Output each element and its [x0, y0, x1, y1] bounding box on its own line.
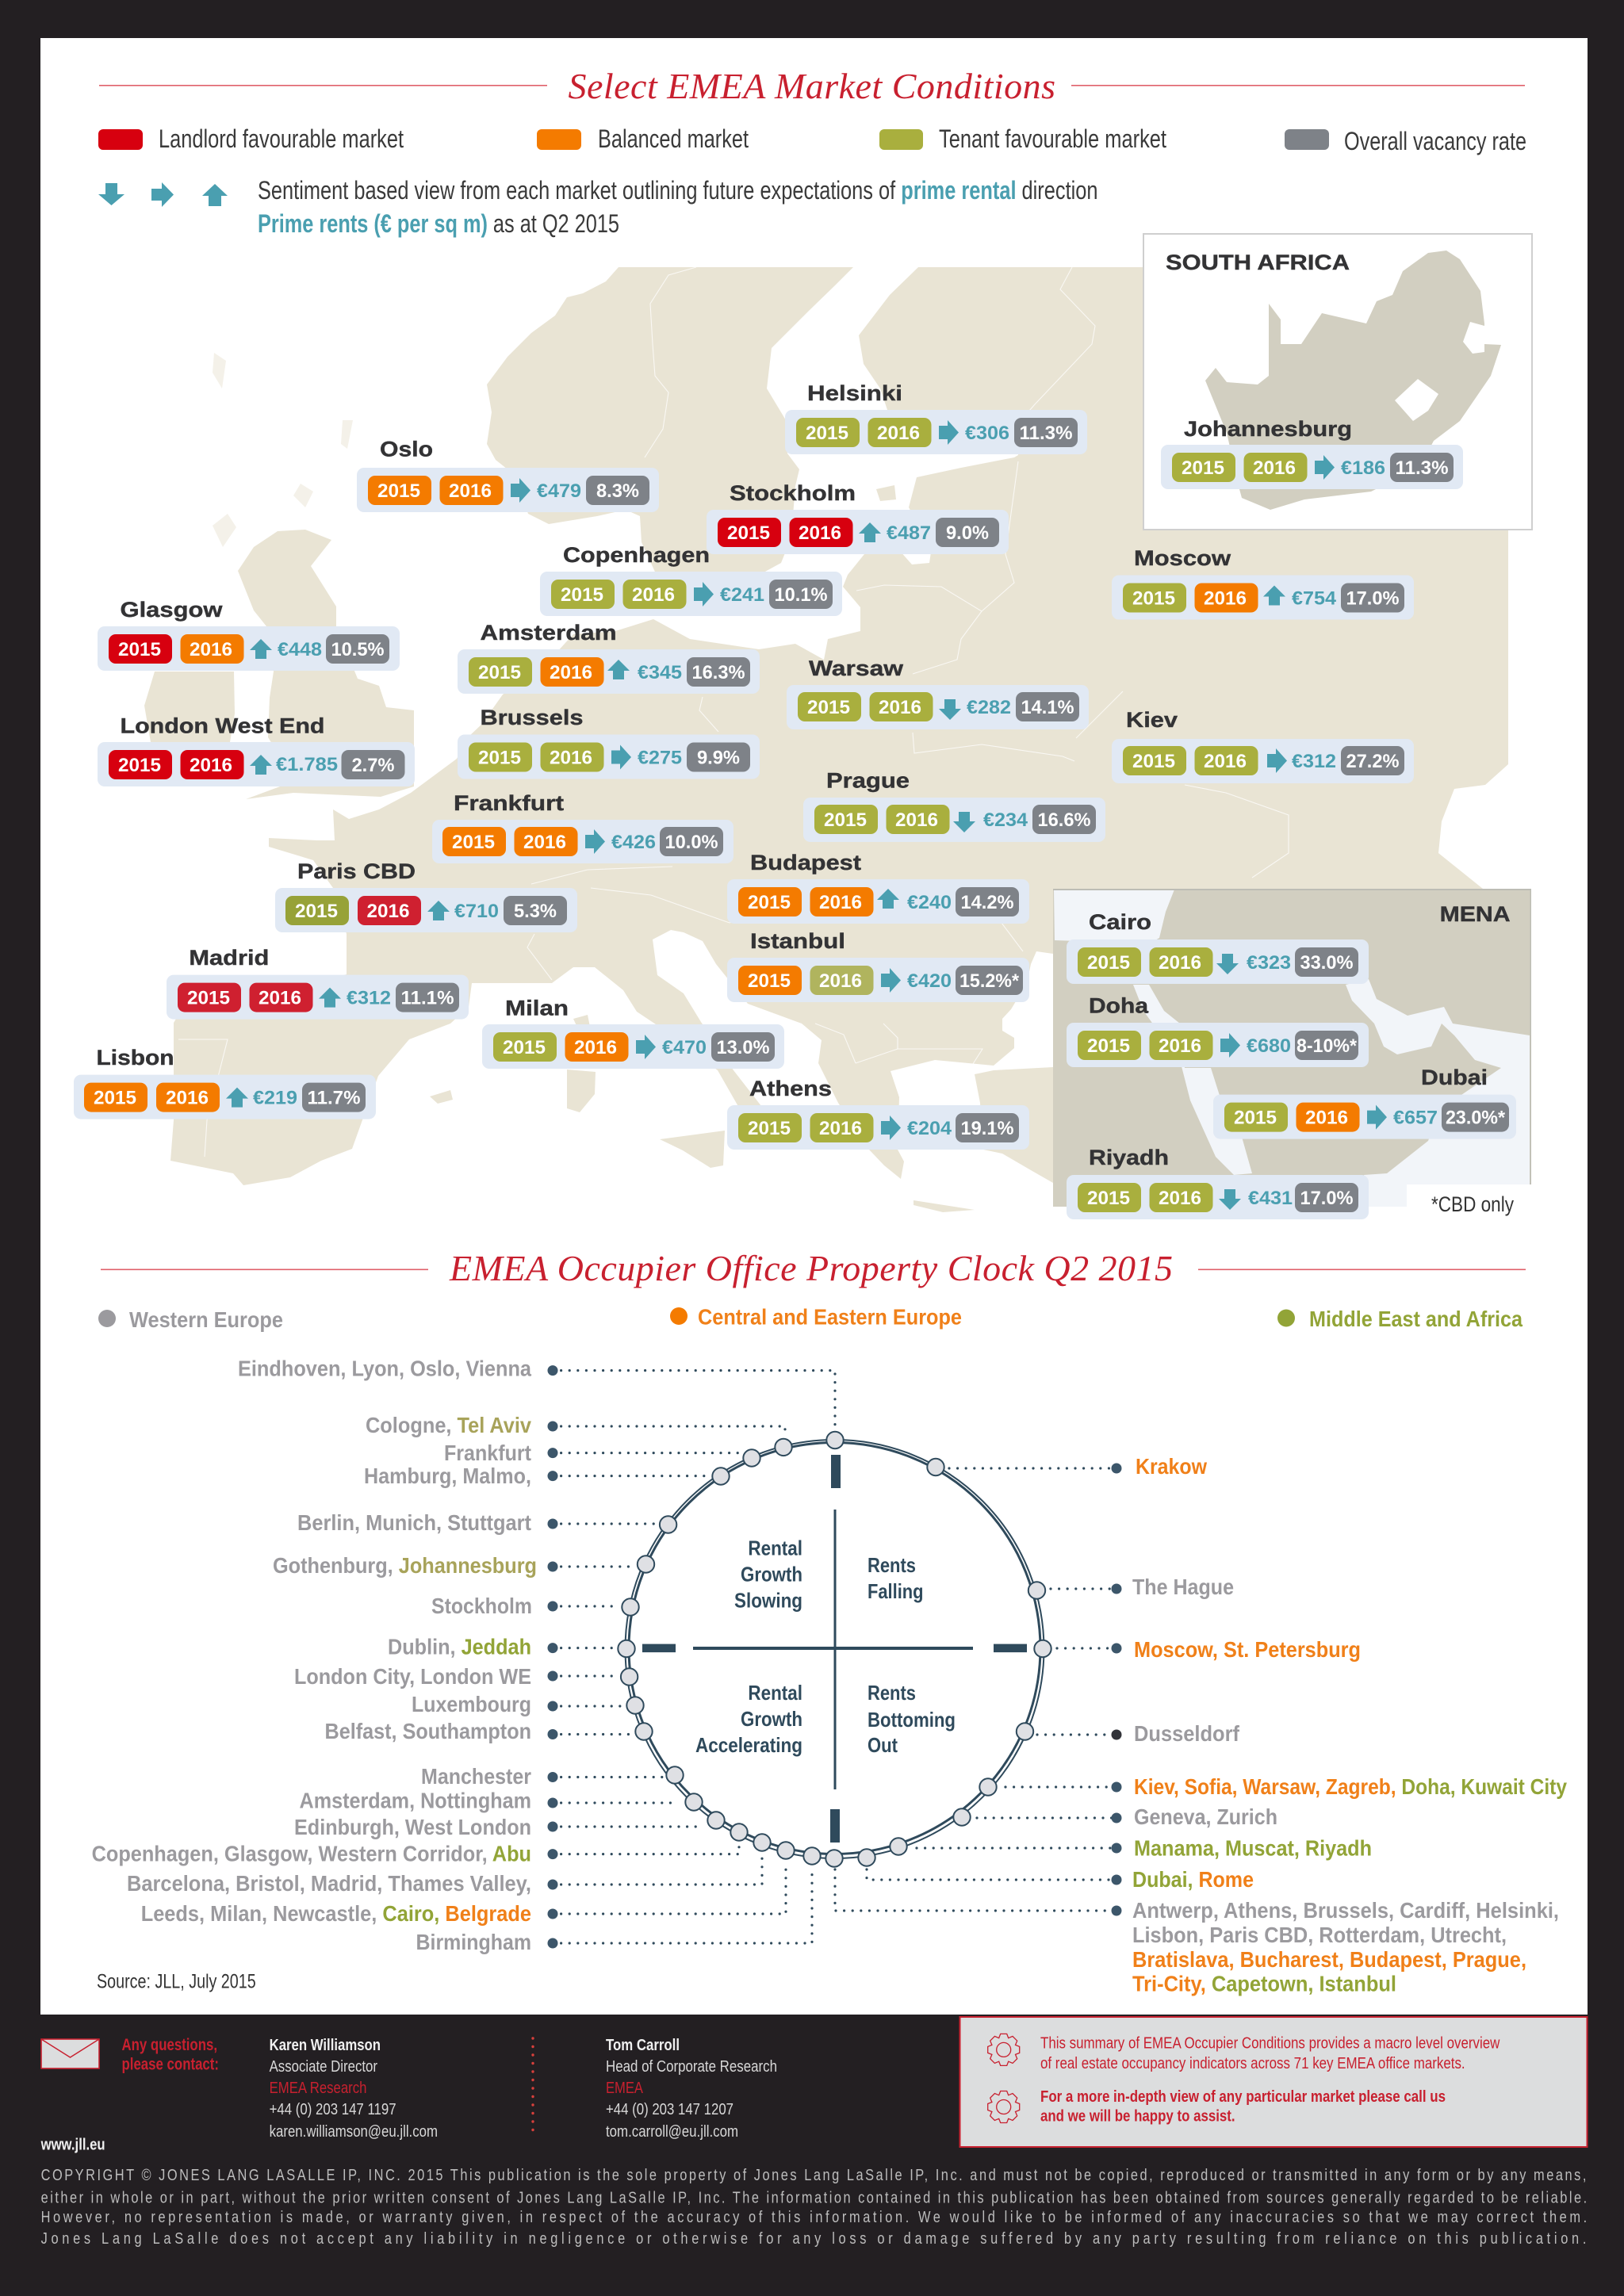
market: Amsterdam: 2016	[550, 662, 592, 683]
contact: Tom Carroll: tom.carroll@eu.jll.com	[606, 2123, 738, 2141]
market: Johannesburg	[1161, 417, 1463, 489]
market: Prague: Prague	[826, 769, 910, 793]
clock labels: left side	[92, 1357, 537, 1954]
market: Kiev: €312	[1292, 751, 1336, 772]
market: Frankfurt: €426	[611, 832, 656, 853]
inset: MENA	[1053, 889, 1542, 1224]
footnote: CBD only: *CBD only	[1431, 1192, 1514, 1216]
market: Copenhagen: €241	[720, 584, 764, 606]
market: Frankfurt: 10.0%	[665, 832, 718, 853]
market: London West End: 2016	[190, 755, 232, 776]
clock labels: left side: Stockholm	[431, 1594, 532, 1618]
market: Doha	[1067, 994, 1369, 1067]
market: Budapest: €240	[907, 892, 952, 913]
market: Amsterdam: €345	[638, 662, 682, 683]
market: Warsaw: 2015	[807, 697, 850, 718]
clock labels: right side: Lisbon, Paris CBD, Rotterdam, Utrecht,	[1132, 1923, 1507, 1947]
market: Stockholm	[707, 481, 1009, 554]
market: Prague: 2015	[824, 809, 867, 831]
contact: Karen Williamson: Karen Williamson	[270, 2037, 381, 2054]
clock labels: left side: Manchester	[421, 1764, 531, 1789]
clock labels: right side: Antwerp, Athens, Brussels, Cardiff, Helsinki,	[1132, 1898, 1559, 1923]
market: Dubai: 23.0%*	[1446, 1108, 1506, 1129]
inset: South Africa	[1143, 234, 1532, 530]
market: Moscow: Moscow	[1134, 546, 1231, 570]
market: Cairo: 2015	[1087, 952, 1130, 974]
market: Dubai	[1213, 1066, 1516, 1139]
contact prompt: please contact:	[122, 2055, 219, 2074]
market: Athens: 2016	[819, 1118, 862, 1139]
market: Milan	[482, 996, 784, 1069]
market: Prague: 16.6%	[1037, 809, 1091, 831]
market: Frankfurt	[432, 791, 733, 863]
market: Budapest: 2016	[819, 892, 862, 913]
clock labels: left side: Amsterdam, Nottingham	[300, 1789, 531, 1812]
market: Madrid	[167, 946, 469, 1020]
market: Johannesburg: €186	[1341, 457, 1385, 479]
market: Doha: 2015	[1087, 1035, 1130, 1057]
clock labels: left side: Belfast, Southampton	[325, 1719, 531, 1743]
market: Lisbon: 2016	[166, 1088, 209, 1109]
market: Riyadh: 2015	[1087, 1188, 1130, 1209]
market: Oslo: Oslo	[380, 438, 433, 461]
market: Madrid: Madrid	[189, 946, 269, 970]
contact: Karen Williamson: EMEA Research	[270, 2080, 366, 2097]
market: Prague: 2016	[895, 809, 938, 831]
market: Frankfurt: 2016	[523, 832, 566, 853]
market: Doha: 2016	[1159, 1035, 1201, 1057]
market: Johannesburg: Johannesburg	[1184, 417, 1352, 441]
market: London West End	[98, 714, 415, 786]
market: Oslo	[357, 438, 659, 512]
quadrant: Rental Growth Slowing: Slowing	[734, 1589, 802, 1613]
market: Istanbul: 2016	[819, 970, 862, 992]
clock labels: right side: Moscow, St. Petersburg	[1134, 1637, 1361, 1662]
market: Madrid: 11.1%	[401, 988, 454, 1009]
market: Brussels: €275	[638, 747, 682, 769]
quadrant: Rents Falling: Rents	[868, 1553, 916, 1577]
market: Moscow: 2016	[1204, 588, 1247, 609]
quadrant: Rental Growth Accelerating: Growth	[741, 1707, 802, 1731]
market: Copenhagen: 2015	[561, 584, 603, 606]
market: Moscow: €754	[1292, 588, 1337, 609]
legend: Middle East and Africa: Middle East and Africa	[1309, 1307, 1522, 1331]
property clock diagram	[618, 1432, 1051, 1867]
market: Glasgow: 2015	[118, 639, 161, 660]
market: Glasgow: 10.5%	[331, 639, 384, 660]
market: Glasgow	[98, 598, 400, 671]
market: Kiev: 2015	[1132, 751, 1175, 772]
market: Warsaw: 14.1%	[1021, 697, 1074, 718]
market: Milan: 13.0%	[717, 1037, 769, 1058]
market: Amsterdam: 2015	[478, 662, 521, 683]
market: Riyadh	[1067, 1146, 1369, 1219]
clock labels: right side: Tri-City, Capetown, Istanbul	[1132, 1972, 1396, 1996]
market: Brussels	[458, 706, 760, 779]
clock labels: left side: Berlin, Munich, Stuttgart	[297, 1510, 531, 1535]
market: Stockholm: €487	[887, 522, 931, 544]
clock labels: right side: Bratislava, Bucharest, Budapest, Prague,	[1132, 1947, 1526, 1972]
quadrant: Rental Growth Accelerating: Rental	[748, 1681, 802, 1705]
copyright text: Jones Lang LaSalle does not accept any liability in negligence or otherwise for any loss or damage suffered by any party resulting from reliance on this publication.	[41, 2229, 1586, 2247]
contact: Tom Carroll	[606, 2037, 777, 2141]
market: Copenhagen: 10.1%	[774, 584, 828, 606]
quadrant: Rental Growth Accelerating	[695, 1681, 802, 1757]
market: London West End: €1.785	[276, 754, 338, 775]
market: Paris CBD: 5.3%	[514, 901, 557, 922]
legend text: sentiment and prime rents: Sentiment based view from each market outlining future expectations of prime rental direction	[258, 176, 1097, 205]
market: Oslo: 2016	[449, 480, 492, 502]
market: Brussels: 2015	[478, 747, 521, 769]
clock labels: right side: Dusseldorf	[1134, 1721, 1240, 1746]
clock labels: left side: Hamburg, Malmo,	[364, 1464, 531, 1488]
clock labels: right side: Manama, Muscat, Riyadh	[1134, 1836, 1372, 1861]
market: Glasgow: €448	[278, 639, 322, 660]
market: Warsaw: Warsaw	[809, 656, 904, 680]
market: Frankfurt: Frankfurt	[454, 791, 564, 815]
market: Lisbon: 11.7%	[308, 1088, 360, 1109]
contact prompt	[122, 2036, 219, 2074]
quadrant: Rents Bottoming Out: Bottoming	[868, 1708, 956, 1732]
market: Moscow: 17.0%	[1346, 588, 1399, 609]
market: Helsinki: €306	[965, 423, 1009, 444]
market: Warsaw: 2016	[879, 697, 921, 718]
source note: Source: JLL, July 2015	[97, 1971, 256, 1993]
market: Madrid: €312	[347, 988, 391, 1009]
market: London West End: London West End	[121, 714, 325, 737]
market: Athens: 2015	[748, 1118, 791, 1139]
market: Moscow	[1112, 546, 1414, 620]
market: Riyadh: 2016	[1159, 1188, 1201, 1209]
market: Oslo: €479	[537, 480, 581, 502]
market: Helsinki: 2016	[877, 423, 920, 444]
market: Kiev: Kiev	[1126, 708, 1178, 732]
clock labels: left side: Luxembourg	[412, 1692, 531, 1716]
market: Paris CBD: Paris CBD	[297, 859, 416, 883]
legend: market types: Landlord favourable market	[159, 124, 404, 153]
market: Helsinki: 2015	[806, 423, 848, 444]
title: EMEA Occupier Office Property Clock: EMEA Occupier Office Property Clock Q2 2015	[449, 1248, 1173, 1288]
market: Doha: €680	[1247, 1035, 1291, 1057]
contact: Tom Carroll: EMEA	[606, 2080, 644, 2097]
quadrant: Rents Bottoming Out: Out	[868, 1733, 898, 1757]
legend: sentiment arrows	[98, 182, 228, 207]
market: Johannesburg: 2016	[1253, 457, 1296, 479]
market: London West End: 2015	[118, 755, 161, 776]
market: Madrid: 2016	[259, 988, 301, 1009]
market: Kiev: 2016	[1204, 751, 1247, 772]
quadrant: Rents Falling: Falling	[868, 1579, 923, 1603]
quadrant: Rental Growth Slowing: Growth	[741, 1563, 802, 1586]
market: Lisbon: 2015	[94, 1088, 136, 1109]
market: Budapest: 2015	[748, 892, 791, 913]
market: Cairo: 33.0%	[1300, 952, 1353, 974]
copyright text	[41, 2165, 1587, 2247]
market: Milan: Milan	[505, 996, 569, 1020]
market: Cairo: €323	[1247, 952, 1291, 974]
market: Helsinki	[785, 381, 1087, 454]
contact: Karen Williamson: karen.williamson@eu.jll.com	[270, 2123, 438, 2141]
quadrant: Rental Growth Slowing: Rental	[748, 1536, 802, 1560]
market: Athens: Athens	[749, 1077, 832, 1100]
market: Amsterdam: Amsterdam	[481, 621, 617, 645]
market: Paris CBD: 2016	[366, 901, 409, 922]
market: Frankfurt: 2015	[452, 832, 495, 853]
market: Stockholm: 2016	[799, 522, 841, 544]
clock labels: left side: Gothenburg, Johannesburg	[273, 1553, 537, 1578]
market: Istanbul: Istanbul	[750, 929, 845, 953]
clock labels: right side	[1132, 1454, 1567, 1996]
clock labels: right side: The Hague	[1132, 1575, 1234, 1599]
market: London West End: 2.7%	[352, 755, 395, 776]
quadrant: Rental Growth Accelerating: Accelerating	[695, 1733, 802, 1757]
market: Helsinki: 11.3%	[1020, 423, 1072, 444]
market: Riyadh: Riyadh	[1089, 1146, 1169, 1169]
website: www.jll.eu	[40, 2136, 105, 2153]
market: Budapest: 14.2%	[961, 892, 1013, 913]
market: Milan: 2016	[574, 1037, 617, 1058]
market: Copenhagen: Copenhagen	[563, 543, 710, 567]
market: Madrid: 2015	[187, 988, 230, 1009]
icon: envelope	[41, 2039, 99, 2068]
market: Dubai: 2016	[1305, 1108, 1348, 1129]
market: Athens	[727, 1077, 1029, 1150]
market: Milan: €470	[662, 1037, 707, 1058]
market: Warsaw	[787, 656, 1089, 729]
market: Paris CBD: €710	[454, 901, 499, 922]
market: Brussels: 2016	[550, 747, 592, 769]
market: Stockholm: Stockholm	[730, 481, 856, 505]
market: Moscow: 2015	[1132, 588, 1175, 609]
quadrant: Rents Falling	[868, 1553, 923, 1603]
clock leader lines and end dots	[547, 1365, 1121, 1949]
map: country borders	[178, 267, 1289, 1157]
market: Lisbon: Lisbon	[97, 1046, 174, 1070]
market: Istanbul: €420	[907, 970, 952, 992]
market: Riyadh: €431	[1248, 1188, 1293, 1209]
market: Cairo	[1067, 910, 1369, 984]
legend text: sentiment and prime rents: Prime rents (€ per sq m) as at Q2 2015	[258, 209, 619, 238]
clock labels: left side: Edinburgh, West London	[294, 1815, 531, 1839]
map of Europe	[144, 267, 1508, 1212]
clock labels: right side: Kiev, Sofia, Warsaw, Zagreb, Doha, Kuwait City	[1134, 1774, 1567, 1799]
market: Glasgow: 2016	[190, 639, 232, 660]
market: Lisbon: €219	[253, 1088, 297, 1109]
summary callout box: This summary of EMEA Occupier Conditions provides a macro level overview	[1040, 2035, 1500, 2053]
market: Johannesburg: 2015	[1182, 457, 1224, 479]
market: Kiev: 27.2%	[1346, 751, 1399, 772]
market: Kiev	[1112, 708, 1414, 783]
market: Stockholm: 9.0%	[946, 522, 989, 544]
legend: market types	[98, 124, 1526, 155]
market: Oslo: 8.3%	[596, 480, 639, 502]
market: Dubai: 2015	[1234, 1108, 1277, 1129]
clock labels: right side: Krakow	[1136, 1454, 1207, 1479]
market: Istanbul: 15.2%*	[959, 970, 1020, 992]
market: Dubai: Dubai	[1421, 1066, 1488, 1089]
market: Athens: €204	[907, 1118, 952, 1139]
legend: market types: Overall vacancy rate	[1344, 127, 1526, 155]
contact: Tom Carroll: Head of Corporate Research	[606, 2058, 777, 2076]
market: Prague	[803, 769, 1105, 842]
copyright text: However, no representation is made, or warranty given, in respect of the accuracy of this information. We would like to be informed of any inaccuracies so that we may correct them.	[41, 2207, 1587, 2225]
summary callout box	[959, 2017, 1588, 2147]
contact prompt: Any questions,	[122, 2036, 217, 2054]
legend: market types: Tenant favourable market	[939, 124, 1166, 153]
market: Budapest	[727, 851, 1029, 924]
title: Select EMEA Market Conditions: Select EMEA Market Conditions	[568, 66, 1055, 106]
clock labels: right side: Dubai, Rome	[1132, 1867, 1254, 1892]
market: Milan: 2015	[503, 1037, 546, 1058]
clock labels: left side: London City, London WE	[294, 1664, 531, 1689]
copyright text: COPYRIGHT © JONES LANG LASALLE IP, INC. 2015 This publication is the sole property of Jones Lang LaSalle IP, Inc. and must not be copied, reproduced or transmitted in any form or by any means,	[41, 2165, 1586, 2183]
summary callout box: For a more in-depth view of any particular market please call us	[1040, 2088, 1446, 2106]
clock labels: left side: Barcelona, Bristol, Madrid, Thames Valley,	[127, 1871, 531, 1896]
clock labels: left side: Leeds, Milan, Newcastle, Cairo, Belgrade	[141, 1901, 531, 1926]
legend: market types: Balanced market	[598, 124, 749, 153]
clock labels: left side: Copenhagen, Glasgow, Western Corridor, Abu	[92, 1842, 531, 1866]
market: Helsinki: Helsinki	[807, 381, 902, 405]
market: Glasgow: Glasgow	[121, 598, 224, 622]
market: Paris CBD	[275, 859, 577, 932]
market: Warsaw: €282	[967, 697, 1011, 718]
market: Athens: 19.1%	[961, 1118, 1013, 1139]
market: Brussels: 9.9%	[697, 747, 740, 769]
quadrant: Rents Bottoming Out: Rents	[868, 1681, 916, 1705]
contact: Karen Williamson	[270, 2037, 438, 2141]
legend: Central and Eastern Europe: Central and Eastern Europe	[698, 1305, 962, 1329]
clock labels: left side: Birmingham	[416, 1930, 531, 1954]
market: Budapest: Budapest	[750, 851, 861, 874]
legend: Western Europe: Western Europe	[129, 1307, 283, 1332]
quadrant: Rental Growth Slowing	[734, 1536, 802, 1613]
summary callout box: and we will be happy to assist.	[1040, 2108, 1235, 2126]
market: Istanbul: 2015	[748, 970, 791, 992]
market: Paris CBD: 2015	[295, 901, 338, 922]
market: Istanbul	[727, 929, 1029, 1002]
market: Amsterdam: 16.3%	[691, 662, 745, 683]
market: Dubai: €657	[1393, 1108, 1438, 1129]
market: Amsterdam	[458, 621, 760, 694]
clock labels: right side: Geneva, Zurich	[1134, 1804, 1277, 1829]
market: Lisbon	[74, 1046, 376, 1119]
quadrant: Rents Bottoming Out	[868, 1681, 956, 1757]
market: Copenhagen: 2016	[632, 584, 675, 606]
clock labels: left side: Eindhoven, Lyon, Oslo, Vienna	[238, 1357, 531, 1381]
clock labels: left side: Cologne, Tel Aviv	[366, 1413, 531, 1437]
clock labels: left side: Dublin, Jeddah	[388, 1635, 531, 1659]
contact: Tom Carroll: Tom Carroll	[606, 2037, 680, 2054]
inset: South Africa: SOUTH AFRICA	[1166, 251, 1350, 274]
market: Cairo: Cairo	[1089, 910, 1151, 934]
market: Cairo: 2016	[1159, 952, 1201, 974]
clock labels: left side: Frankfurt	[444, 1441, 531, 1465]
market: Doha: Doha	[1089, 994, 1149, 1018]
market: Prague: €234	[983, 809, 1028, 831]
market: Copenhagen	[540, 543, 842, 616]
legend text: sentiment and prime rents	[258, 176, 1097, 238]
dotted divider	[531, 2038, 534, 2137]
copyright text: either in whole or in part, without the prior written consent of Jones Lang LaSalle IP, Inc. The information contained in this publication has been obtained from sources generally regarded to be reliable.	[41, 2188, 1587, 2206]
market: Riyadh: 17.0%	[1300, 1188, 1353, 1209]
contact: Karen Williamson: +44 (0) 203 147 1197	[270, 2101, 396, 2118]
market: Doha: 8-10%*	[1297, 1035, 1358, 1057]
contact: Karen Williamson: Associate Director	[270, 2058, 377, 2076]
summary callout box: of real estate occupancy indicators across 71 key EMEA office markets.	[1040, 2055, 1465, 2072]
market: Oslo: 2015	[377, 480, 420, 502]
market: Brussels: Brussels	[481, 706, 584, 729]
market: Stockholm: 2015	[727, 522, 770, 544]
market: Johannesburg: 11.3%	[1396, 457, 1448, 479]
contact: Tom Carroll: +44 (0) 203 147 1207	[606, 2101, 733, 2118]
inset: MENA: MENA	[1440, 902, 1511, 926]
